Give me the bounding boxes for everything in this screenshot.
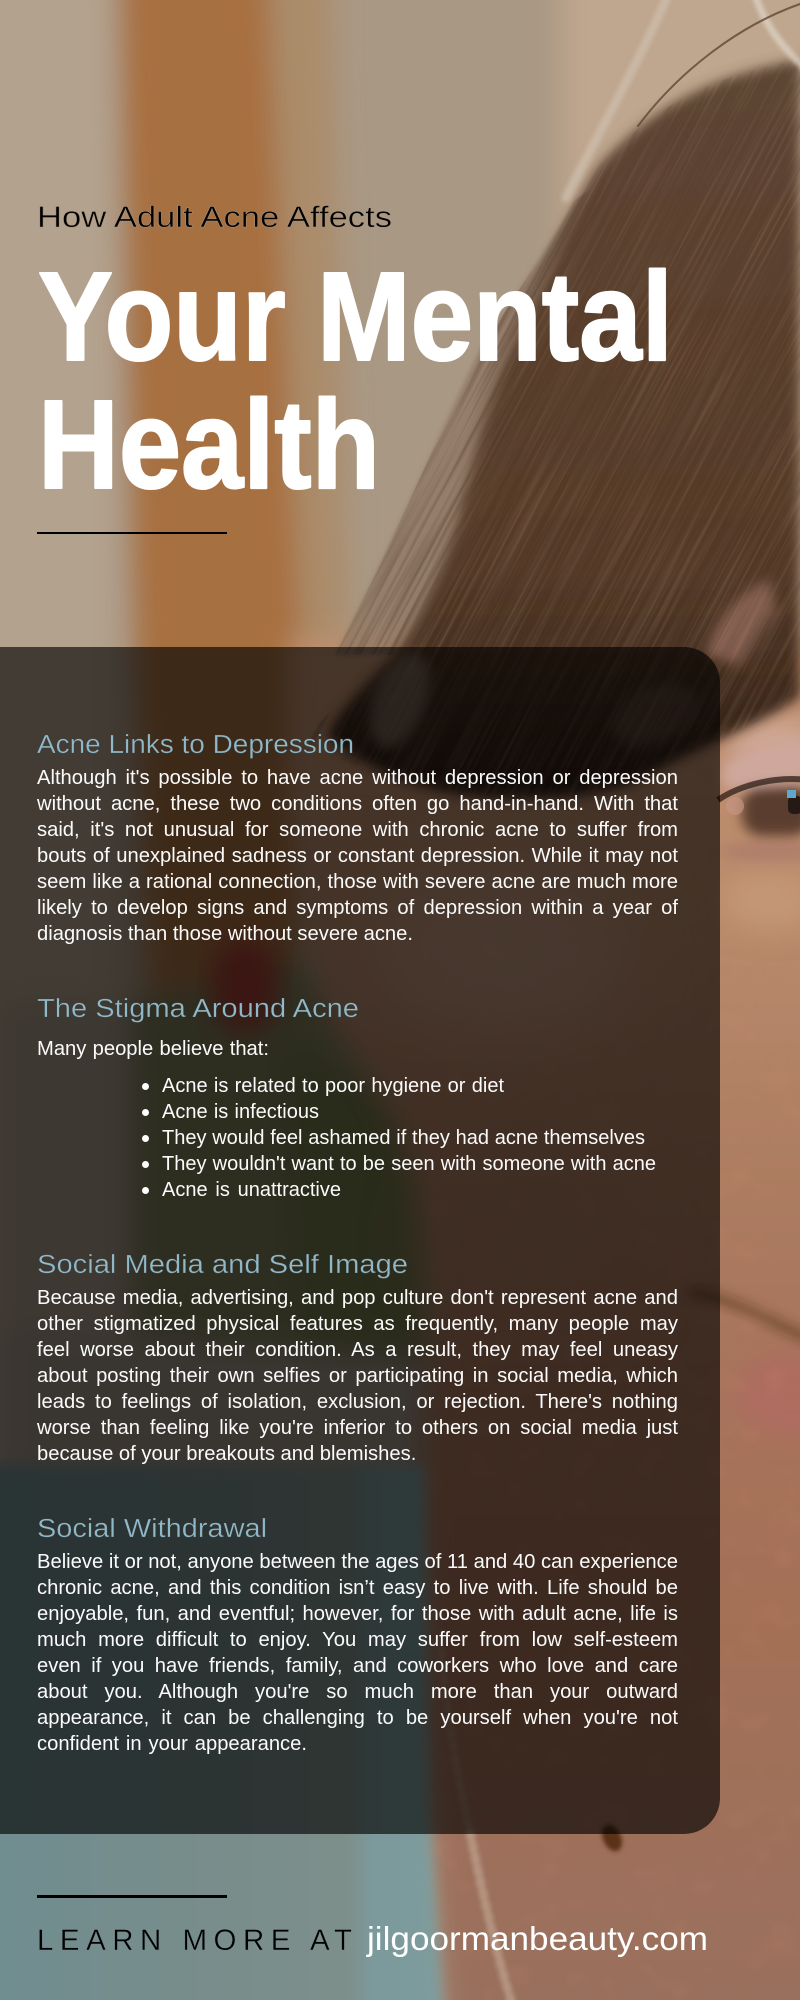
paragraph: social withdrawal: about you. Although you're so much more than your outward: [37, 1681, 678, 1703]
paragraph: acne links to depression: Although it's possible to have acne without depression or depression: [37, 767, 678, 789]
dark translucent text panel: [0, 647, 720, 1834]
heading: the stigma around acne: The Stigma Around Acne: [37, 995, 359, 1023]
necklace: [440, 1640, 514, 2000]
footer divider: [37, 1895, 227, 1898]
intro line: many people believe: Many people believe that:: [37, 1038, 269, 1060]
paragraph: social withdrawal: confident in your appearance.: [37, 1733, 307, 1755]
glasses arm and hair strand at top right: [566, 0, 800, 198]
bullet list: stigma beliefs: They would feel ashamed if they had acne themselves: [162, 1127, 645, 1149]
paragraph: social withdrawal: Believe it or not, anyone between the ages of 11 and 40 can experience: [37, 1551, 678, 1573]
mole: [598, 1822, 626, 1854]
bullet list: stigma beliefs: [142, 1075, 656, 1201]
heading: acne links to depression: Acne Links to Depression: [37, 731, 354, 759]
paragraph: social withdrawal: [37, 1551, 678, 1755]
paragraph: acne links to depression: without acne, these two conditions often go hand-in-hand. With that: [37, 793, 678, 815]
heading: social withdrawal: Social Withdrawal: [37, 1515, 267, 1543]
paragraph: acne links to depression: said, it's not unusual for someone with chronic acne to suffer from: [37, 819, 678, 841]
shirt: [0, 1465, 445, 2000]
paragraph: acne links to depression: diagnosis than those without severe acne.: [37, 923, 413, 945]
bullet list: stigma beliefs: Acne is unattractive: [162, 1179, 341, 1201]
paragraph: social withdrawal: even if you have friends, family, and coworkers who love and care: [37, 1655, 678, 1677]
paragraph: acne links to depression: [37, 767, 678, 945]
paragraph: acne links to depression: likely to develop signs and symptoms of depression within a year of: [37, 897, 678, 919]
paragraph: social media and self image: Because media, advertising, and pop culture don't represent acne and: [37, 1287, 678, 1309]
title divider: [37, 532, 227, 534]
paragraph: social media and self image: feel worse about their condition. As a result, they may feel uneasy: [37, 1339, 678, 1361]
title: Your Mental: [38, 246, 673, 387]
paragraph: acne links to depression: bouts of unexplained sadness or constant depression. While it may not: [37, 845, 678, 867]
paragraph: social withdrawal: much more difficult to enjoy. You may suffer from low self-esteem: [37, 1629, 678, 1651]
paragraph: social media and self image: because of your breakouts and blemishes.: [37, 1443, 416, 1465]
bullet list: stigma beliefs: Acne is related to poor hygiene or diet: [162, 1075, 504, 1097]
paragraph: social withdrawal: appearance, it can be challenging to be yourself when you're not: [37, 1707, 678, 1729]
paragraph: social withdrawal: enjoyable, fun, and eventful; however, for those with adult acne, life is: [37, 1603, 678, 1625]
title: [38, 246, 673, 515]
subtitle: How Adult Acne Affects: [37, 201, 392, 234]
eye: [718, 738, 800, 861]
skin blemish texture: [430, 860, 800, 2000]
hair wisps at edge: [335, 190, 590, 655]
footer: website: jilgoormanbeauty.com: [366, 1920, 708, 1957]
paragraph: social media and self image: leads to feelings of isolation, exclusion, or rejection. There's nothing: [37, 1391, 678, 1413]
heading: social media and self image: Social Media and Self Image: [37, 1251, 408, 1279]
footer: learn more: LEARN MORE AT: [37, 1924, 352, 1957]
paragraph: social media and self image: worse than feeling like you're inferior to others on social media just: [37, 1417, 678, 1439]
mouth crease: [690, 1292, 800, 1340]
hair: [330, 60, 800, 798]
paragraph: social media and self image: [37, 1287, 678, 1465]
hair strands texture: [310, 64, 800, 792]
bullet list: stigma beliefs: They wouldn't want to be seen with someone with acne: [162, 1153, 656, 1175]
paragraph: social media and self image: about posting their own selfies or participating in social media, which: [37, 1365, 678, 1387]
title: Health: [38, 374, 380, 515]
paragraph: social media and self image: other stigmatized physical features as frequently, many people may: [37, 1313, 678, 1335]
paragraph: acne links to depression: seem like a rational connection, those with severe acne are much more: [37, 871, 678, 893]
paragraph: social withdrawal: chronic acne, and this condition isn’t easy to live with. Life should be: [37, 1577, 678, 1599]
bullet list: stigma beliefs: Acne is infectious: [162, 1101, 319, 1123]
